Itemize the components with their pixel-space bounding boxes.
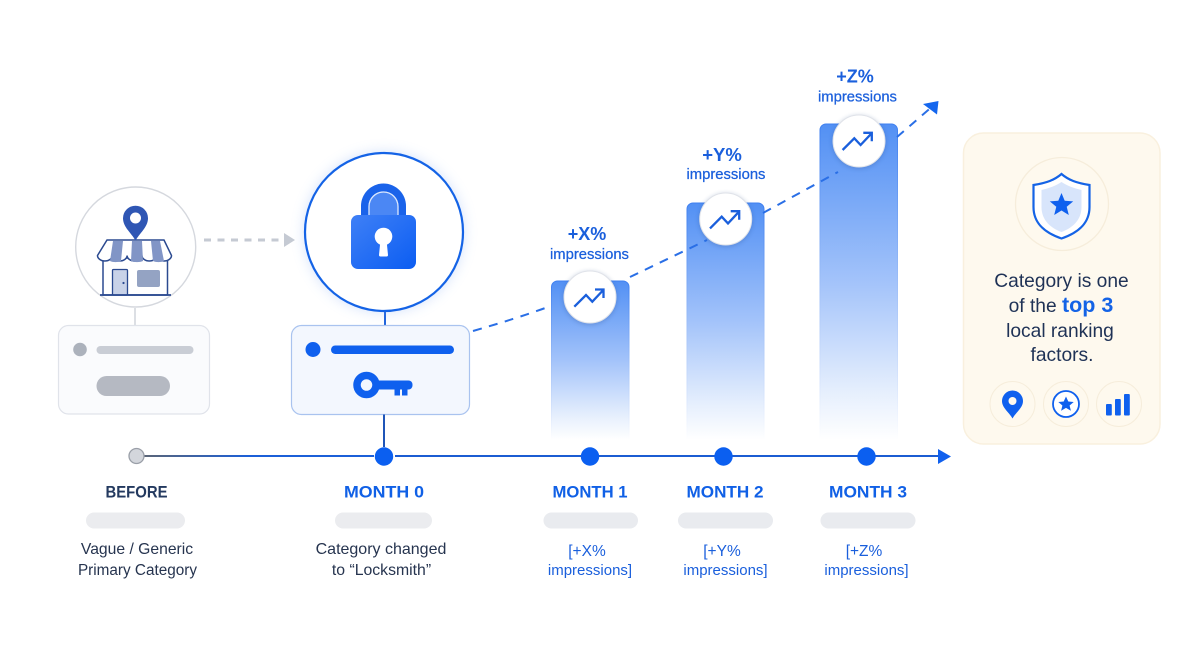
card: generic category listing	[58, 326, 210, 414]
timeline column: month 3: MONTH 3	[829, 482, 907, 502]
text: category statement: local ranking	[1006, 321, 1114, 342]
panel: before stage	[58, 187, 210, 414]
label: impressions under Y: impressions	[687, 167, 765, 183]
icon: shield with star	[1016, 158, 1108, 250]
timeline axis	[129, 447, 951, 466]
timeline column: month 0: to “Locksmith”	[332, 562, 431, 579]
timeline column: before	[78, 482, 197, 579]
marker: month 2	[714, 447, 733, 466]
timeline column: month 3: [+Z%	[846, 543, 883, 560]
icon: key	[357, 376, 412, 396]
panel: ranking factor callout	[964, 133, 1160, 444]
timeline column: month 3: impressions]	[824, 562, 909, 579]
panel: month 0 stage	[292, 153, 470, 447]
timeline column: before: BEFORE	[106, 482, 168, 502]
text: category statement: factors.	[1031, 345, 1093, 366]
marker: before	[129, 448, 144, 464]
timeline column: month 2	[678, 482, 773, 579]
icon: store with map pin	[76, 187, 196, 307]
timeline column: month 1: [+X%	[568, 543, 606, 560]
timeline column: month 1: MONTH 1	[552, 482, 628, 502]
timeline column: month 2: impressions]	[683, 562, 768, 579]
label: +Z% impressions: +Z%	[836, 66, 874, 86]
timeline column: month 0: MONTH 0	[344, 482, 424, 502]
label: impressions under X: impressions	[550, 247, 629, 263]
icon: trend badge month 2	[699, 193, 753, 247]
timeline column: before: Primary Category	[78, 562, 197, 579]
arrow: before to month 0	[204, 233, 295, 247]
timeline column: month 3	[820, 482, 916, 579]
trend line: dashed growth	[473, 101, 938, 331]
arrowhead	[938, 449, 951, 464]
icon: star badge	[1044, 382, 1088, 426]
bar: month 2	[687, 203, 764, 440]
icon: trend badge month 3	[832, 115, 886, 169]
bar chart: impressions growth	[473, 66, 938, 440]
marker: month 1	[581, 447, 599, 466]
marker: month 0	[375, 447, 393, 466]
bar: month 3	[820, 124, 898, 440]
icon: bar signal	[1096, 382, 1142, 426]
text: category statement	[994, 271, 1129, 366]
timeline column: month 1: impressions]	[548, 562, 632, 579]
timeline column: month 2: MONTH 2	[686, 482, 764, 502]
label: impressions under Z: impressions	[818, 90, 897, 106]
icon: location	[990, 382, 1035, 426]
timeline column: month 2: [+Y%	[703, 543, 741, 560]
label: +X% impressions: +X%	[568, 224, 606, 244]
timeline column: month 0: Category changed	[316, 541, 446, 558]
text: category statement: Category is one	[994, 271, 1129, 292]
connector: card to timeline	[383, 414, 385, 447]
connector: store to card	[134, 308, 136, 326]
text: category statement: of the top 3	[1009, 293, 1113, 317]
icon: padlock in circle	[305, 153, 463, 311]
connector: lock to card	[384, 312, 386, 326]
bar: month 1	[552, 281, 629, 440]
timeline column: month 0	[316, 482, 446, 579]
marker: month 3	[857, 447, 876, 466]
label: +Y% impressions: +Y%	[702, 144, 742, 165]
card: locksmith category listing	[292, 326, 470, 414]
timeline column: before: Vague / Generic	[81, 541, 193, 558]
icon: trend badge month 1	[563, 271, 617, 325]
timeline column: month 1	[544, 482, 638, 579]
